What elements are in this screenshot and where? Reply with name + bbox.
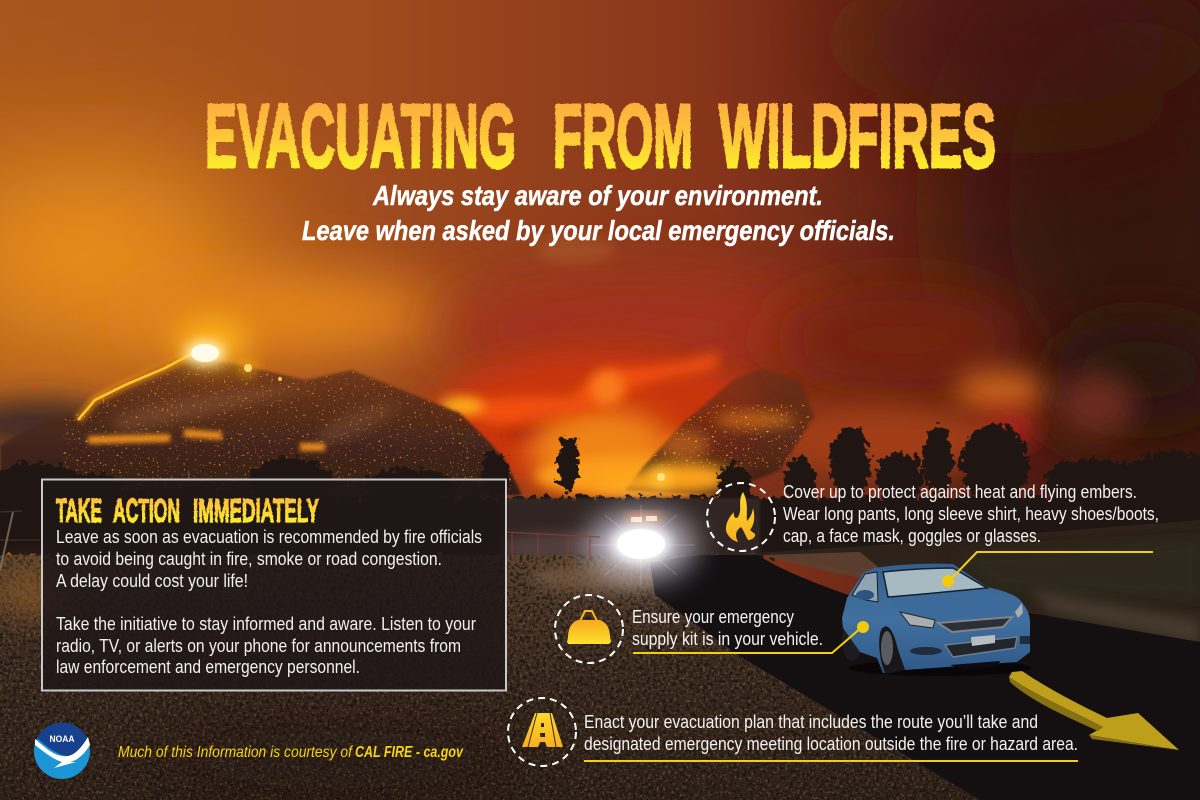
panel text: Take the initiative to stay informed and aware. Listen to your: [56, 614, 476, 634]
icon: bag: [555, 595, 623, 663]
callout text: [584, 712, 1078, 754]
right burning mountain: [595, 368, 814, 495]
mirror: [856, 590, 874, 600]
arrow: evacuation route: [1009, 671, 1179, 750]
headlights: [900, 612, 935, 628]
callout: evacuation plan: [508, 698, 1078, 766]
panel text: to avoid being caught in fire, smoke or road congestion.: [56, 549, 442, 569]
callout text: Cover up to protect against heat and flying embers.: [783, 482, 1137, 502]
leader line: [942, 552, 1153, 587]
panel text: Leave as soon as evacuation is recommended by fire officials: [56, 527, 482, 547]
panel heading: ACTION: [113, 492, 180, 529]
underline: [584, 760, 1078, 762]
panel text: [56, 527, 482, 677]
bumper shade: [950, 661, 1000, 670]
panel heading: TAKE: [56, 492, 102, 529]
car body: [842, 564, 1030, 673]
fog lamp: [910, 647, 942, 655]
icon: NOAA logo: [34, 723, 90, 779]
treeline silhouettes: [0, 424, 1200, 557]
title: EVACUATING: [205, 87, 516, 187]
callout text: [632, 607, 823, 649]
fire truck with headlights: [587, 505, 695, 585]
icon: NOAA logo: NOAA: [50, 734, 75, 744]
road: [650, 555, 1200, 800]
callout text: Ensure your emergency: [632, 607, 794, 627]
hood highlight: [889, 590, 1018, 622]
sky glow and smoke: [0, 0, 1200, 450]
grille: [938, 617, 1012, 632]
panel text: radio, TV, or alerts on your phone for announcements from: [56, 636, 461, 656]
chain-link fence: [0, 511, 600, 570]
icon: road: [508, 698, 576, 766]
front wheel: [879, 626, 905, 674]
licence plate: [971, 635, 995, 646]
panel text: law enforcement and emergency personnel.: [56, 657, 360, 677]
windshield: [883, 568, 987, 597]
credit line: Much of this Information is courtesy of: [118, 744, 353, 761]
credit line: CAL FIRE - ca.gov: [355, 744, 464, 761]
title: FROM: [553, 87, 693, 187]
subtitle: [302, 180, 895, 246]
lower grille: [945, 637, 1017, 657]
left burning mountain: [0, 320, 530, 510]
rear wheel: [842, 619, 862, 661]
side windows: [852, 572, 878, 602]
callout text: supply kit is in your vehicle.: [632, 629, 823, 649]
callout text: [783, 482, 1159, 546]
icon: flame: [707, 483, 775, 551]
callout: supply kit: [555, 595, 869, 663]
haze around fire truck: [500, 498, 760, 564]
right fog lamp: [1020, 636, 1030, 644]
title: WILDFIRES: [719, 87, 996, 187]
panel: take action immediately: [42, 480, 506, 690]
panel heading: IMMEDIATELY: [193, 492, 319, 529]
callout text: designated emergency meeting location outside the fire or hazard area.: [584, 734, 1078, 754]
leader line: [633, 621, 869, 653]
panel heading: [56, 492, 319, 529]
flames and burning smoke: [430, 350, 1135, 496]
panel text: A delay could cost your life!: [56, 571, 248, 591]
subtitle: Always stay aware of your environment.: [372, 180, 823, 211]
subtitle: Leave when asked by your local emergency officials.: [302, 215, 895, 246]
callout text: cap, a face mask, goggles or glasses.: [783, 526, 1041, 546]
car illustration: [842, 564, 1032, 676]
callout: cover up: [707, 482, 1159, 587]
callout text: Enact your evacuation plan that includes the route you’ll take and: [584, 712, 1038, 732]
ground: [0, 555, 1000, 800]
right roadside dirt and grass: [755, 520, 1200, 645]
